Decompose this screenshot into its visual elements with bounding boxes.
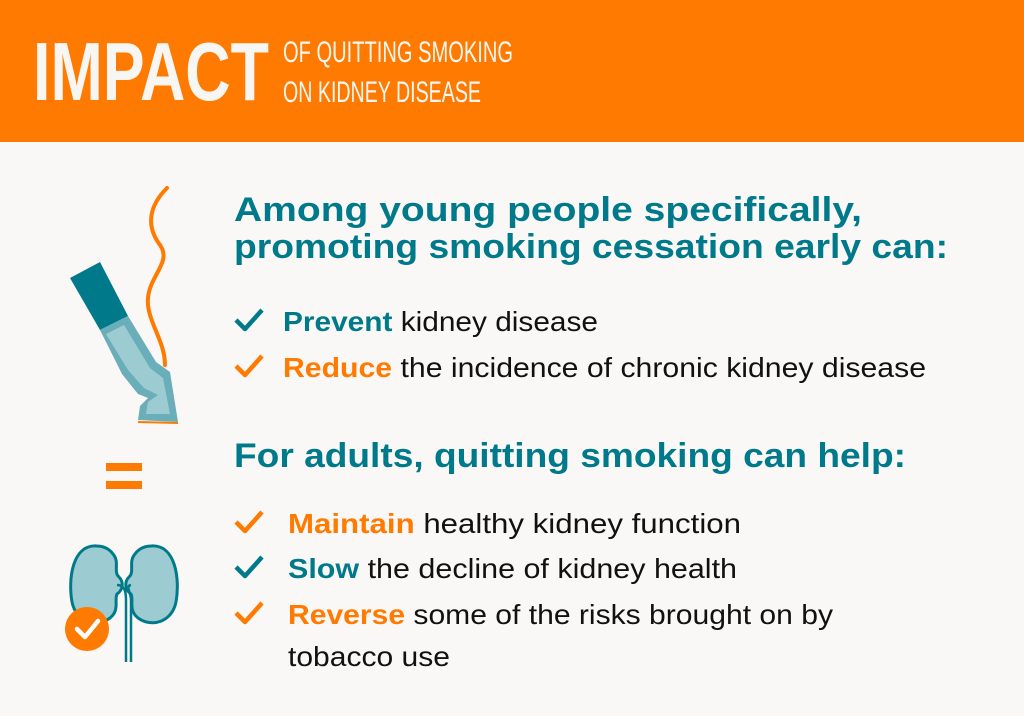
list: young people <box>236 306 926 383</box>
heading: adults: For adults, quitting smoking can help: <box>234 437 906 475</box>
subtitle: ON KIDNEY DISEASE <box>283 76 481 109</box>
title: IMPACT <box>33 25 269 118</box>
list: young people: Reduce the incidence of chronic kidney disease <box>283 352 926 383</box>
list: adults: Slow the decline of kidney health <box>288 553 737 584</box>
icon: equals <box>106 463 142 489</box>
icon: cigarette <box>70 262 178 423</box>
subtitle <box>283 36 513 109</box>
icon: kidneys with check <box>65 546 177 662</box>
list: adults: Maintain healthy kidney function <box>288 508 741 539</box>
list: adults <box>236 508 833 672</box>
subtitle: OF QUITTING SMOKING <box>283 36 513 69</box>
list: young people: Prevent kidney disease <box>283 306 598 337</box>
heading: young people: Among young people specifically, <box>234 191 862 229</box>
list: adults: tobacco use <box>288 641 450 672</box>
header bar <box>0 0 1024 142</box>
icon: smoke <box>148 188 167 365</box>
heading: young people: promoting smoking cessation early can: <box>234 228 948 266</box>
heading: young people <box>234 191 948 266</box>
list: adults: Reverse some of the risks brought on by <box>288 599 833 630</box>
